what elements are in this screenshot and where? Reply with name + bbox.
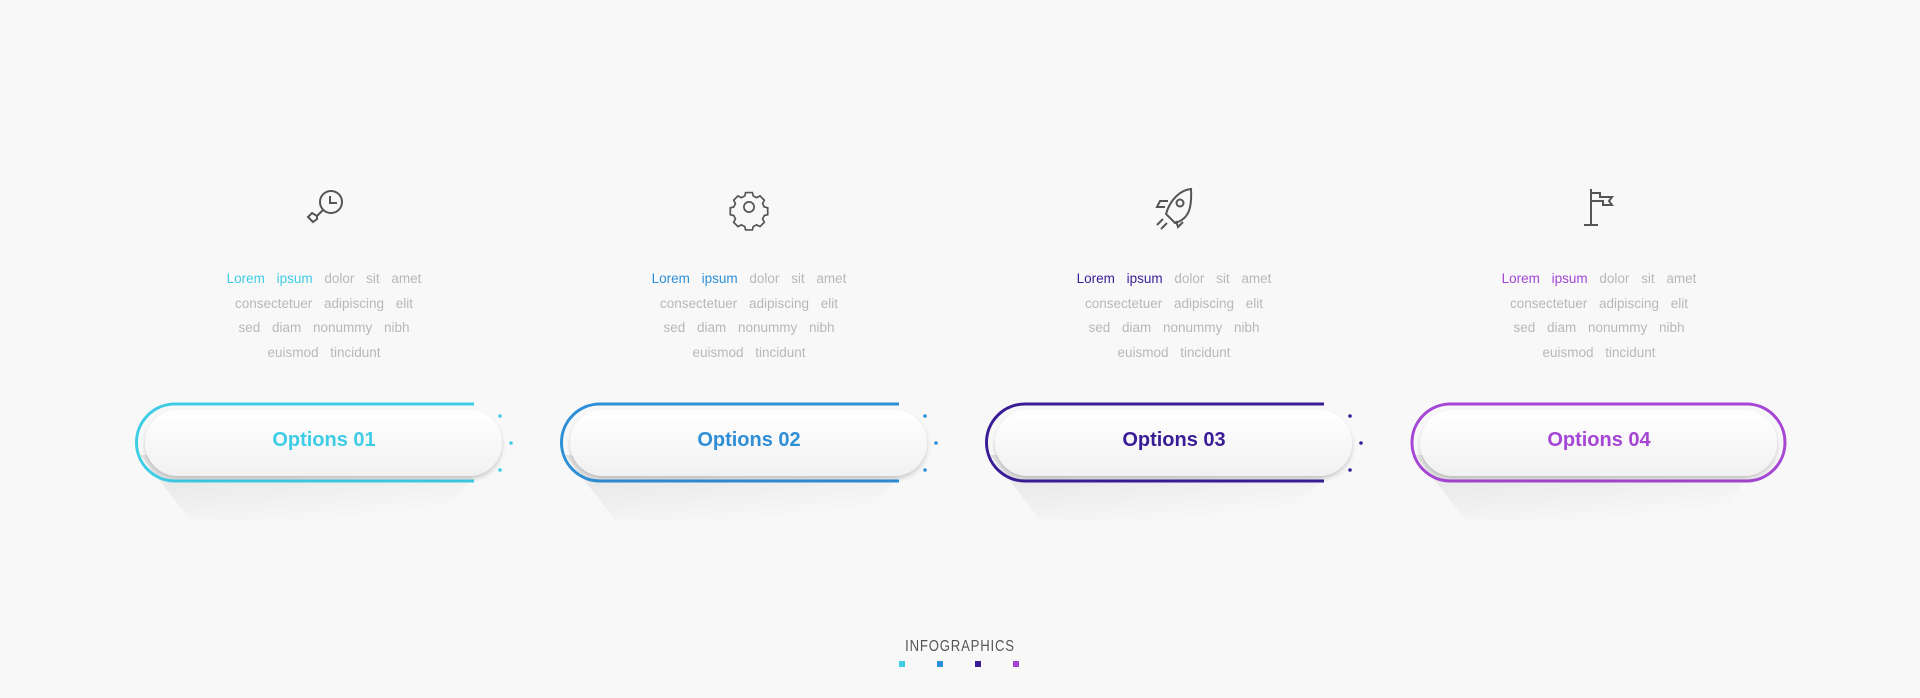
label 2: Options 02 [697, 429, 801, 451]
pill 3 [986, 404, 1363, 520]
text block 3 [1077, 271, 1272, 360]
text block 3: consectetuer adipiscing elit [1085, 296, 1263, 310]
icon: gear [730, 193, 768, 230]
text block 3: Lorem ipsum dolor sit amet [1077, 271, 1271, 286]
text block 2: Lorem ipsum dolor sit amet [652, 271, 846, 286]
label 1: Options 01 [272, 429, 376, 451]
legend squares [899, 661, 1019, 667]
text block 1: consectetuer adipiscing elit [235, 296, 413, 310]
icon: rocket [1157, 189, 1191, 229]
text block 2: sed diam nonummy nibh [663, 320, 835, 335]
text block 1: euismod tincidunt [267, 344, 381, 360]
text block 3: euismod tincidunt [1117, 344, 1231, 360]
text block 4 [1502, 271, 1696, 360]
text block 1 [227, 271, 422, 360]
text block 4: Lorem ipsum dolor sit amet [1502, 271, 1696, 286]
text block 4: euismod tincidunt [1542, 344, 1656, 360]
text block 3: sed diam nonummy nibh [1088, 320, 1260, 335]
label 3: Options 03 [1122, 429, 1226, 451]
text block 1: sed diam nonummy nibh [238, 320, 410, 335]
text block 2 [652, 271, 846, 360]
pill 4 [1412, 404, 1785, 520]
icon: flag [1584, 189, 1612, 225]
footer title: INFOGRAPHICS [905, 638, 1015, 655]
text block 2: consectetuer adipiscing elit [660, 296, 838, 310]
pill 1 [136, 404, 513, 520]
text block 2: euismod tincidunt [692, 344, 806, 360]
text block 4: sed diam nonummy nibh [1513, 320, 1685, 335]
icon: magnifier clock [308, 191, 342, 222]
text block 4: consectetuer adipiscing elit [1510, 296, 1688, 310]
text block 1: Lorem ipsum dolor sit amet [227, 271, 421, 286]
pill 2 [562, 404, 938, 520]
label 4: Options 04 [1547, 429, 1651, 451]
